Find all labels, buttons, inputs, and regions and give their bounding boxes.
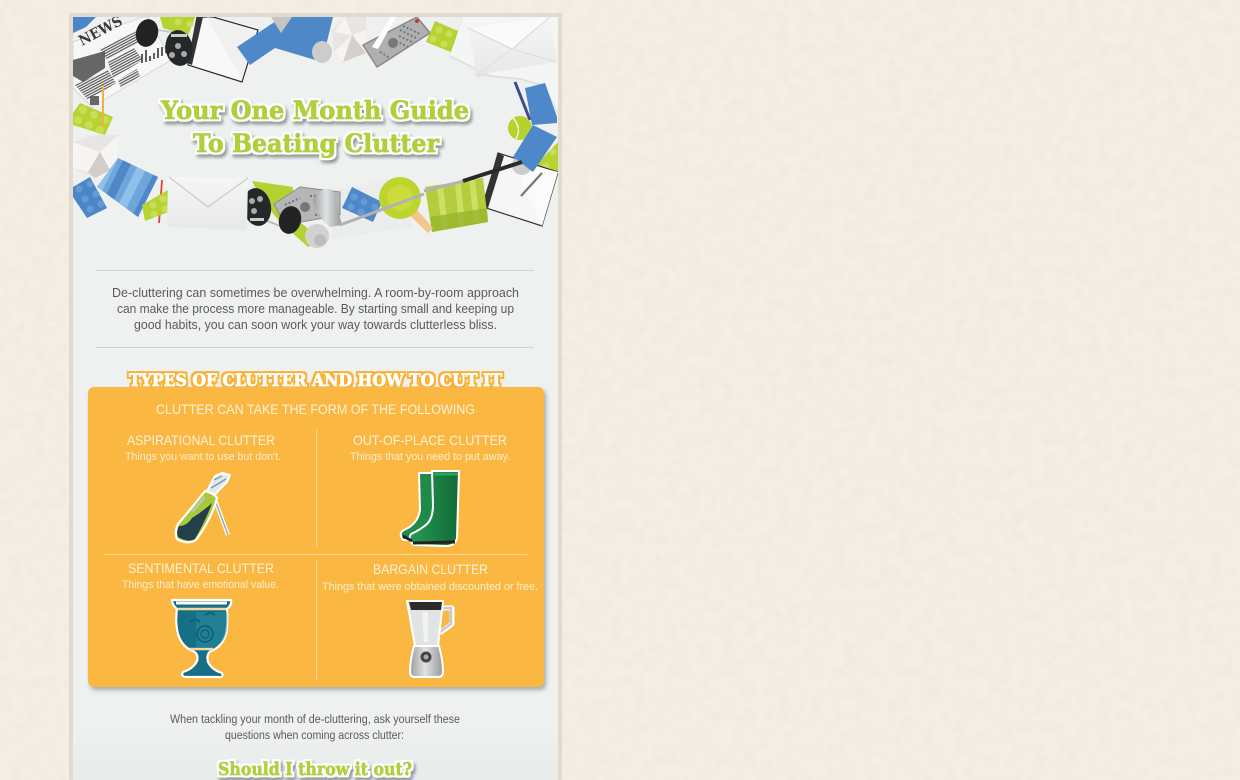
aspirational clutter text: Things you want to use but don't. <box>125 451 281 463</box>
icon: golf bag <box>176 473 230 542</box>
green lego top <box>160 17 195 36</box>
green lego top right <box>426 21 458 52</box>
golf club shaft <box>340 162 522 225</box>
sentimental clutter text: Things that have emotional value. <box>122 579 279 591</box>
envelope lower left <box>167 177 248 230</box>
green lego right <box>538 142 558 172</box>
clipboard top <box>187 17 258 82</box>
aspirational clutter text <box>125 433 281 463</box>
section heading: TYPES OF CLUTTER AND HOW TO CUT IT <box>129 371 502 391</box>
icon: blender <box>407 601 452 677</box>
remote control bottom <box>274 187 340 225</box>
blue lego corner <box>73 17 96 33</box>
vertical divider lower <box>316 560 317 680</box>
sentimental clutter text: SENTIMENTAL CLUTTER <box>128 561 274 576</box>
closing text <box>170 712 460 742</box>
title: Your One Month Guide <box>160 96 469 125</box>
icon: teal urn <box>172 600 231 677</box>
pen right <box>515 82 530 120</box>
envelope bottom centre <box>332 177 412 238</box>
sentimental clutter text <box>122 561 279 591</box>
silver cup <box>313 189 342 227</box>
crumpled paper left <box>73 135 118 178</box>
tennis ball <box>508 116 532 140</box>
intro paragraph: De-cluttering can sometimes be overwhelming. A room-by-room approach <box>112 285 519 300</box>
blue pillow <box>97 158 158 217</box>
icon: green rubber boots <box>401 471 459 546</box>
green lego left <box>73 103 113 135</box>
green pillow bottom <box>425 178 488 232</box>
blue panel right <box>512 125 557 175</box>
green lego lower left <box>142 190 168 221</box>
out-of-place clutter text <box>350 433 510 463</box>
blue sock right <box>525 83 557 125</box>
closing text: questions when coming across clutter: <box>225 728 404 742</box>
panel heading: CLUTTER CAN TAKE THE FORM OF THE FOLLOWING <box>156 402 475 417</box>
orange pencil <box>102 85 104 127</box>
intro paragraph: can make the process more manageable. By starting small and keeping up <box>117 301 514 316</box>
panel: types of clutter <box>88 387 544 687</box>
intro rule top <box>96 270 534 271</box>
horizontal divider <box>104 554 527 555</box>
blue shirt top <box>237 17 333 65</box>
closing text: When tackling your month of de-cluttering, ask yourself these <box>170 712 460 726</box>
title <box>160 96 469 158</box>
clutter illustration border <box>73 12 558 248</box>
clipboard right <box>482 153 558 226</box>
key fob bottom <box>247 188 302 234</box>
intro paragraph: good habits, you can soon work your way towards clutterless bliss. <box>134 317 497 332</box>
bargain clutter text: BARGAIN CLUTTER <box>373 562 488 577</box>
envelopes top right <box>450 17 558 112</box>
out-of-place clutter text: OUT-OF-PLACE CLUTTER <box>353 433 507 448</box>
newspaper: NEWS <box>76 12 125 50</box>
table tennis paddle <box>379 177 433 233</box>
intro paragraph <box>112 285 519 332</box>
bargain clutter text <box>322 562 538 593</box>
blue lego bottom <box>342 187 382 222</box>
blue lego left <box>73 177 107 218</box>
subheading: should I throw it out: Should I throw it out? <box>218 759 412 780</box>
panel background <box>88 387 544 687</box>
red pencil <box>159 180 162 223</box>
intro rule bottom <box>96 347 534 348</box>
remote control top <box>363 17 430 67</box>
green sock bottom <box>252 181 329 248</box>
bargain clutter text: Things that were obtained discounted or free. <box>322 581 538 593</box>
vertical divider upper <box>316 429 317 547</box>
title: To Beating Clutter <box>193 129 440 158</box>
content panel <box>69 13 562 780</box>
key fob top <box>136 19 192 66</box>
aspirational clutter text: ASPIRATIONAL CLUTTER <box>127 433 275 448</box>
crumpled paper top <box>332 17 366 62</box>
newspaper <box>73 12 171 107</box>
out-of-place clutter text: Things that you need to put away. <box>350 451 510 463</box>
